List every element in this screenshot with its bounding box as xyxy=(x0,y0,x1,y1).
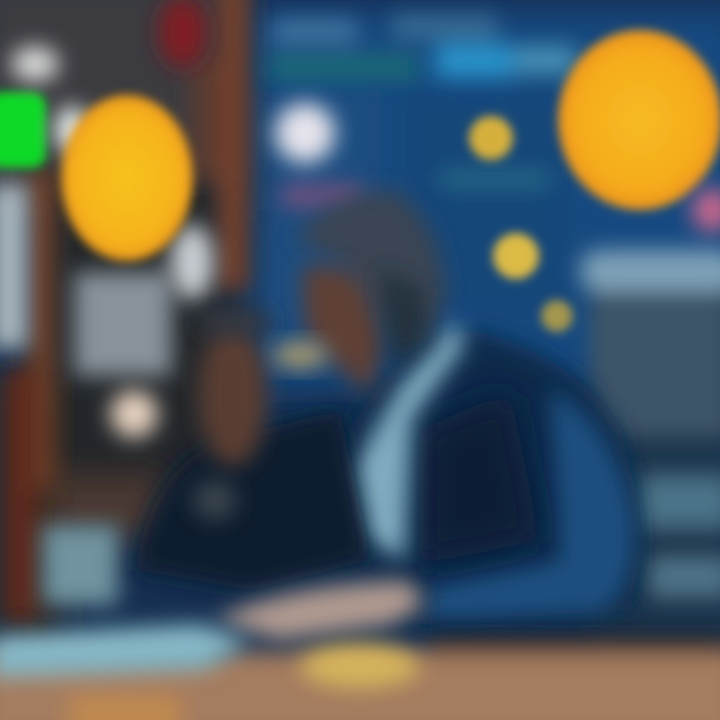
white dots xyxy=(11,46,335,438)
green square xyxy=(0,92,46,168)
pink marker xyxy=(692,188,720,232)
paper on desk xyxy=(0,624,250,678)
hair xyxy=(295,190,445,345)
yellow object on desk xyxy=(300,644,420,688)
wooden posts xyxy=(4,0,248,620)
desk xyxy=(0,636,720,720)
shirt xyxy=(352,320,465,560)
panel: blue display background xyxy=(250,0,720,390)
yellow coin right xyxy=(558,30,720,210)
face xyxy=(302,265,385,395)
person: second figure xyxy=(135,308,370,590)
left pale panels xyxy=(0,184,172,605)
panel: dark left room background xyxy=(0,0,240,640)
grey stack right xyxy=(580,250,720,640)
top labels on display xyxy=(268,16,576,208)
red banner xyxy=(159,0,207,68)
small yellow coins xyxy=(469,116,573,332)
person: man in suit xyxy=(295,190,638,625)
hand xyxy=(215,580,425,640)
yellow coin left xyxy=(61,95,193,261)
